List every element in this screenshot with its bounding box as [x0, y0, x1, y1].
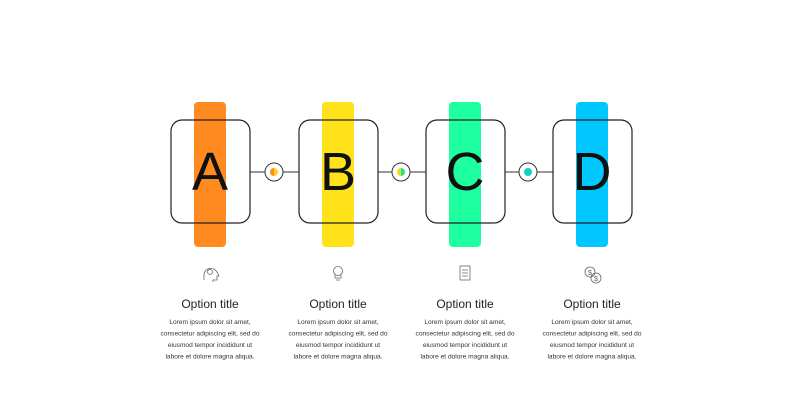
option A text: Lorem ipsum dolor sit amet, [169, 319, 251, 326]
option C text: labore et dolore magna aliqua. [420, 354, 510, 360]
option B text: Option title [309, 297, 367, 311]
option B text: Lorem ipsum dolor sit amet, [297, 319, 379, 326]
option B text: consectetur adipiscing elit, sed do [289, 330, 388, 338]
icon: coins [585, 267, 601, 283]
option D text: Lorem ipsum dolor sit amet, [551, 319, 633, 326]
option B text: eiusmod tempor incididunt ut [296, 342, 380, 349]
step C: C [446, 142, 484, 202]
dot AB [265, 163, 283, 181]
option D text: eiusmod tempor incididunt ut [550, 342, 634, 349]
option C text: Lorem ipsum dolor sit amet, [424, 319, 506, 326]
option B text: labore et dolore magna aliqua. [293, 354, 383, 360]
step C [426, 102, 505, 247]
option D text: consectetur adipiscing elit, sed do [543, 330, 642, 338]
option D text: Option title [563, 297, 621, 311]
option D text: labore et dolore magna aliqua. [547, 354, 637, 360]
option B text [289, 297, 388, 360]
connector lines [250, 171, 553, 173]
option A text: labore et dolore magna aliqua. [165, 354, 255, 360]
option C text: Option title [436, 297, 494, 311]
step D [553, 102, 632, 247]
icon: head gear [204, 268, 219, 282]
dot BC [392, 163, 410, 181]
icon: coins: $ [588, 270, 592, 277]
option A text: Option title [181, 297, 239, 311]
option C text: consectetur adipiscing elit, sed do [416, 330, 515, 338]
step B: B [320, 142, 356, 202]
icon: coins: $ [594, 276, 598, 283]
step A: A [192, 142, 228, 202]
icon: bulb [334, 266, 342, 280]
step B [299, 102, 378, 247]
option A text: consectetur adipiscing elit, sed do [161, 330, 260, 338]
option C text: eiusmod tempor incididunt ut [423, 342, 507, 349]
icon: document [460, 266, 470, 280]
option A text: eiusmod tempor incididunt ut [168, 342, 252, 349]
option C text [416, 297, 515, 360]
option D text [543, 297, 642, 360]
step D: D [572, 142, 612, 202]
option A text [161, 297, 260, 360]
step A [171, 102, 250, 247]
dot CD [519, 163, 537, 181]
